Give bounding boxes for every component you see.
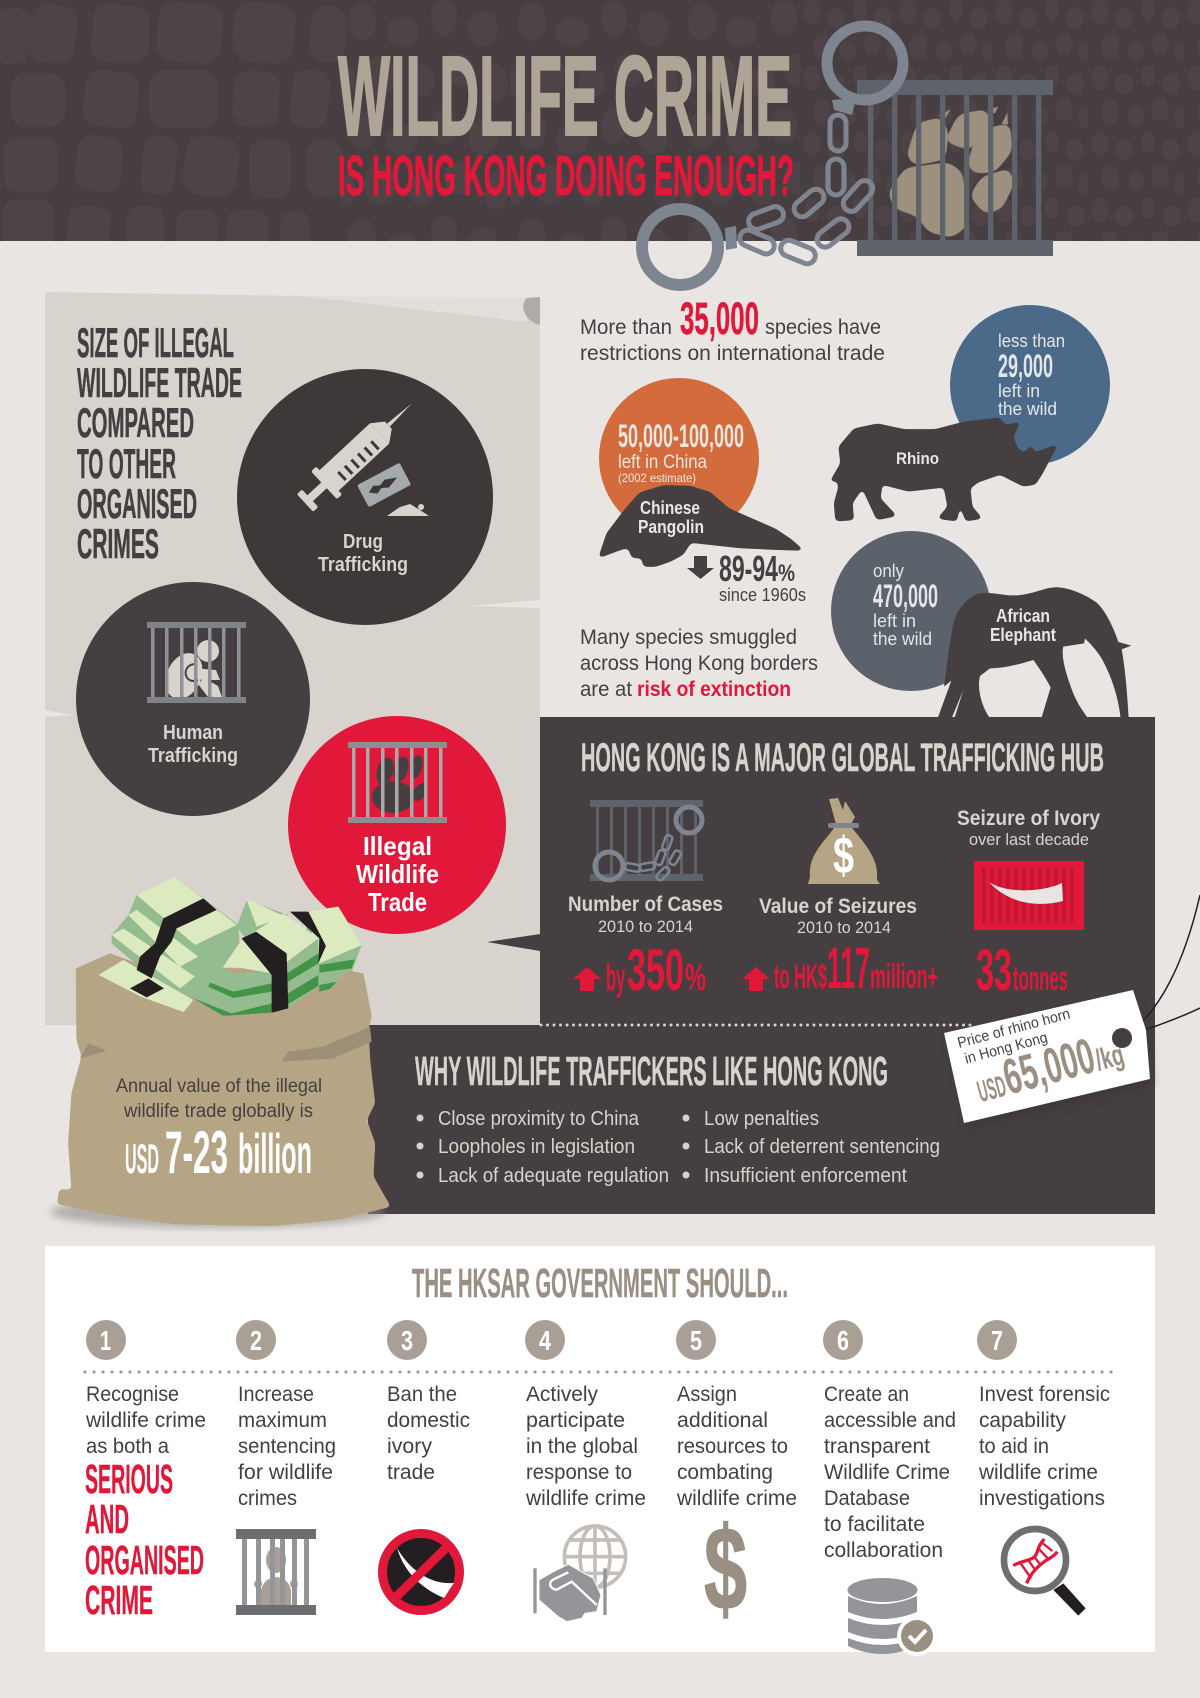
- pangolin label: Pangolin: [638, 517, 704, 537]
- label: illegal wildlife trade: Wildlife: [356, 859, 439, 889]
- rhino label: Rhino: [896, 449, 939, 468]
- stat: ivory 33 tonnes: 33: [976, 938, 1012, 1003]
- icon: person in cage: [147, 622, 246, 705]
- step 1: Recognise: [86, 1383, 179, 1406]
- icon: money bag: $: [833, 827, 854, 885]
- step 5: [676, 1320, 797, 1635]
- label: human trafficking: [148, 722, 238, 767]
- step 1: SERIOUS: [85, 1456, 173, 1502]
- illustration: cage with paw: [857, 80, 1053, 256]
- label: drug trafficking: Trafficking: [318, 554, 408, 576]
- icon: cage with cuffs: [590, 800, 703, 881]
- elephant silhouette: [938, 587, 1131, 718]
- species intro text: [580, 293, 885, 365]
- annual value figure: [125, 1119, 312, 1186]
- panel: government recommendations: [45, 1246, 1155, 1656]
- population text: 29,000: [998, 348, 1053, 384]
- label: illegal wildlife trade: [356, 831, 439, 917]
- stat: value of seizures to HK$117 million+: to HK$: [774, 958, 827, 996]
- icon: razor blade: [357, 463, 411, 507]
- decline stat: 89-94: [719, 548, 778, 589]
- icon: money bag: [808, 798, 880, 885]
- step 6: transparent: [824, 1435, 930, 1458]
- stat labels: Number of Cases: [568, 893, 723, 916]
- step 3: 3: [401, 1325, 413, 1356]
- step 4: response to: [526, 1461, 632, 1484]
- smuggled species text: are at: [580, 678, 632, 701]
- step 3: domestic: [387, 1409, 470, 1432]
- stat: number of cases up 350%: %: [685, 957, 706, 999]
- circle: human trafficking: [76, 582, 310, 816]
- stat: value of seizures to HK$117 million+: million+: [870, 958, 938, 996]
- step 6: 6: [837, 1325, 849, 1356]
- icon: dollar: $: [704, 1503, 747, 1635]
- step 7: 7: [991, 1325, 1003, 1356]
- smuggled species text: Many species smuggled: [580, 626, 797, 649]
- step 1: 1: [100, 1325, 111, 1356]
- illustration: handcuffs and chain: [642, 26, 903, 285]
- step 7: wildlife crime: [978, 1461, 1098, 1484]
- icon: syringe: [292, 390, 425, 517]
- step 7: to aid in: [979, 1435, 1049, 1458]
- step 7: capability: [979, 1409, 1066, 1432]
- step 2: 2: [250, 1325, 262, 1356]
- tag text: in Hong Kong: [963, 1029, 1049, 1068]
- step 1: CRIME: [85, 1577, 153, 1623]
- elephant label: Elephant: [990, 625, 1056, 645]
- text: WILDLIFE TRADE: [77, 359, 242, 406]
- bullet list: Low penalties: [704, 1108, 819, 1130]
- step 2: for wildlife: [238, 1461, 333, 1484]
- population text: left in: [873, 611, 916, 631]
- sack text: [116, 1076, 322, 1122]
- step 4: Actively: [526, 1383, 598, 1406]
- species: rhino: [829, 305, 1110, 521]
- population text: the wild: [873, 629, 932, 649]
- bullet list: [416, 1108, 940, 1187]
- step 7: Invest forensic: [979, 1383, 1110, 1406]
- money sack: billion: [238, 1122, 312, 1185]
- decline stat: [687, 548, 806, 605]
- bullet list: Loopholes in legislation: [438, 1136, 635, 1158]
- population text: less than: [998, 331, 1065, 351]
- pangolin silhouette: [598, 485, 804, 567]
- step 2: Increase: [238, 1383, 314, 1406]
- species intro text: species have: [765, 316, 881, 339]
- stat: number of cases up 350%: 350: [627, 938, 684, 1003]
- step 6: accessible and: [824, 1409, 956, 1432]
- step 4: 4: [539, 1325, 551, 1356]
- step 4: in the global: [526, 1435, 638, 1458]
- price tag: rhino horn: [944, 895, 1200, 1129]
- stat labels: over last decade: [969, 830, 1089, 849]
- population text: left in China: [618, 452, 707, 473]
- population text: [873, 561, 938, 649]
- step 2: crimes: [238, 1487, 297, 1510]
- dotted line: [85, 1370, 1116, 1374]
- step 5: 5: [690, 1325, 702, 1356]
- bullet list: Insufficient enforcement: [704, 1165, 907, 1187]
- step 7: [977, 1320, 1110, 1616]
- money sack: [50, 877, 391, 1228]
- bank notes: [98, 877, 362, 1018]
- step 6: to facilitate: [824, 1513, 925, 1536]
- step 5: resources to: [677, 1435, 788, 1458]
- smuggled species text: [580, 626, 818, 701]
- icon: paw in cage: [348, 742, 447, 823]
- stat: number of cases up 350%: by: [606, 957, 625, 999]
- smuggled species text: across Hong Kong borders: [580, 652, 818, 675]
- panel heading: size of illegal wildlife trade: TO OTHER: [77, 440, 176, 487]
- population text: the wild: [998, 399, 1057, 419]
- step 5: combating: [677, 1461, 773, 1484]
- icon: powder: [387, 504, 429, 516]
- step 6: [823, 1320, 956, 1656]
- step 1: [85, 1320, 206, 1623]
- step 1: wildlife crime: [85, 1409, 206, 1432]
- step 6: collaboration: [824, 1539, 943, 1562]
- population text: [998, 331, 1065, 419]
- pangolin label: Chinese: [640, 498, 700, 518]
- tag text: Price of rhino horn: [956, 1005, 1072, 1052]
- step 6: Create an: [824, 1383, 909, 1406]
- step 1: AND: [85, 1496, 129, 1542]
- label: human trafficking: Human: [163, 722, 223, 744]
- step 4: participate: [526, 1409, 625, 1432]
- step 2: sentencing: [238, 1435, 336, 1458]
- annual value figure: 7-23: [165, 1119, 228, 1186]
- step 4: [525, 1320, 646, 1622]
- population text: only: [873, 561, 904, 581]
- step 5: Assign: [677, 1383, 737, 1406]
- step 3: [382, 1320, 470, 1610]
- elephant label: African: [996, 606, 1050, 626]
- text: SIZE OF ILLEGAL: [77, 319, 234, 366]
- tag text: [956, 995, 1129, 1115]
- panel: why wildlife traffickers like Hong Kong: [368, 1025, 1155, 1214]
- species: African elephant: [831, 531, 1131, 718]
- panel heading: size of illegal wildlife trade: [77, 319, 242, 567]
- sack text: wildlife trade globally is: [123, 1101, 313, 1122]
- dotted divider: [541, 1024, 975, 1026]
- step 7: investigations: [979, 1487, 1105, 1510]
- step 3: trade: [387, 1461, 435, 1484]
- population text: 50,000-100,000: [618, 418, 744, 454]
- decline stat: %: [778, 560, 795, 587]
- panel: government recommendations: ORGANISED: [85, 1537, 204, 1583]
- icon: person behind bars: [236, 1529, 316, 1615]
- step 6: Wildlife Crime: [824, 1461, 950, 1484]
- icon: database: [848, 1578, 937, 1656]
- decline stat: since 1960s: [719, 585, 806, 605]
- header band with crocodile skin: [0, 0, 1200, 262]
- bullet list: Lack of adequate regulation: [438, 1165, 669, 1187]
- icon: magnifier with DNA: [1004, 1529, 1086, 1616]
- smuggled species text: risk of extinction: [637, 678, 791, 701]
- population text: left in: [998, 381, 1040, 401]
- pangolin label: [638, 498, 704, 537]
- circle: drug trafficking: [237, 369, 493, 625]
- panel: Hong Kong trafficking hub: [487, 717, 1155, 1025]
- species intro text: 35,000: [680, 293, 759, 344]
- sack text: Annual value of the illegal: [116, 1076, 322, 1097]
- step 5: wildlife crime: [676, 1487, 797, 1510]
- icon: globe and handshake: [533, 1526, 626, 1622]
- species intro text: More than: [580, 316, 672, 339]
- tag text: 65,000: [997, 1027, 1100, 1105]
- annual value figure: USD: [125, 1135, 159, 1182]
- panel: government recommendations: THE HKSAR GOVERNMENT SHOULD...: [412, 1260, 788, 1306]
- step 4: wildlife crime: [525, 1487, 646, 1510]
- panel: Hong Kong trafficking hub: tonnes: [1013, 960, 1068, 998]
- stat labels: [568, 807, 1100, 937]
- tag text: /kg: [1092, 1038, 1127, 1077]
- stat labels: Seizure of Ivory: [957, 807, 1100, 830]
- tag text: USD: [974, 1070, 1010, 1109]
- step 5: additional: [677, 1409, 768, 1432]
- label: drug trafficking: Drug: [343, 531, 383, 553]
- step 1: as both a: [86, 1435, 169, 1458]
- step 3: ivory: [387, 1435, 433, 1458]
- population text: [618, 418, 744, 485]
- stat: value of seizures to HK$117 million+: 117: [827, 936, 870, 1001]
- population text: 470,000: [873, 578, 938, 614]
- panel heading: size of illegal wildlife trade: CRIMES: [77, 520, 159, 567]
- step 6: Database: [824, 1487, 910, 1510]
- elephant label: [990, 606, 1056, 645]
- rhino silhouette: [829, 417, 1058, 521]
- icon: no ivory: [382, 1534, 460, 1610]
- step 2: maximum: [238, 1409, 327, 1432]
- species: Chinese pangolin: [598, 378, 806, 605]
- sack shadow: [50, 1196, 386, 1228]
- panel heading: size of illegal wildlife trade: ORGANISED: [77, 480, 197, 527]
- bullet list: Lack of deterrent sentencing: [704, 1136, 940, 1158]
- label: human trafficking: Trafficking: [148, 745, 238, 767]
- panel: size of illegal trade (paper): [45, 292, 540, 1025]
- circle: illegal wildlife trade: [288, 716, 506, 934]
- label: illegal wildlife trade: Illegal: [363, 831, 432, 861]
- stat labels: 2010 to 2014: [797, 918, 891, 937]
- panel heading: size of illegal wildlife trade: COMPARED: [77, 399, 194, 446]
- stat labels: 2010 to 2014: [598, 917, 693, 936]
- population text: (2002 estimate): [618, 471, 696, 485]
- species intro text: restrictions on international trade: [580, 342, 885, 365]
- step 2: [236, 1320, 336, 1615]
- stat labels: Value of Seizures: [759, 895, 917, 918]
- label: illegal wildlife trade: Trade: [368, 887, 427, 917]
- stat: value of seizures to HK$117 million+: [742, 936, 938, 1001]
- icon: ivory container: [974, 861, 1084, 930]
- label: drug trafficking: [318, 531, 408, 576]
- step 3: Ban the: [387, 1383, 457, 1406]
- stat: number of cases up 350%: [573, 938, 706, 1003]
- bullet list: Close proximity to China: [438, 1108, 640, 1130]
